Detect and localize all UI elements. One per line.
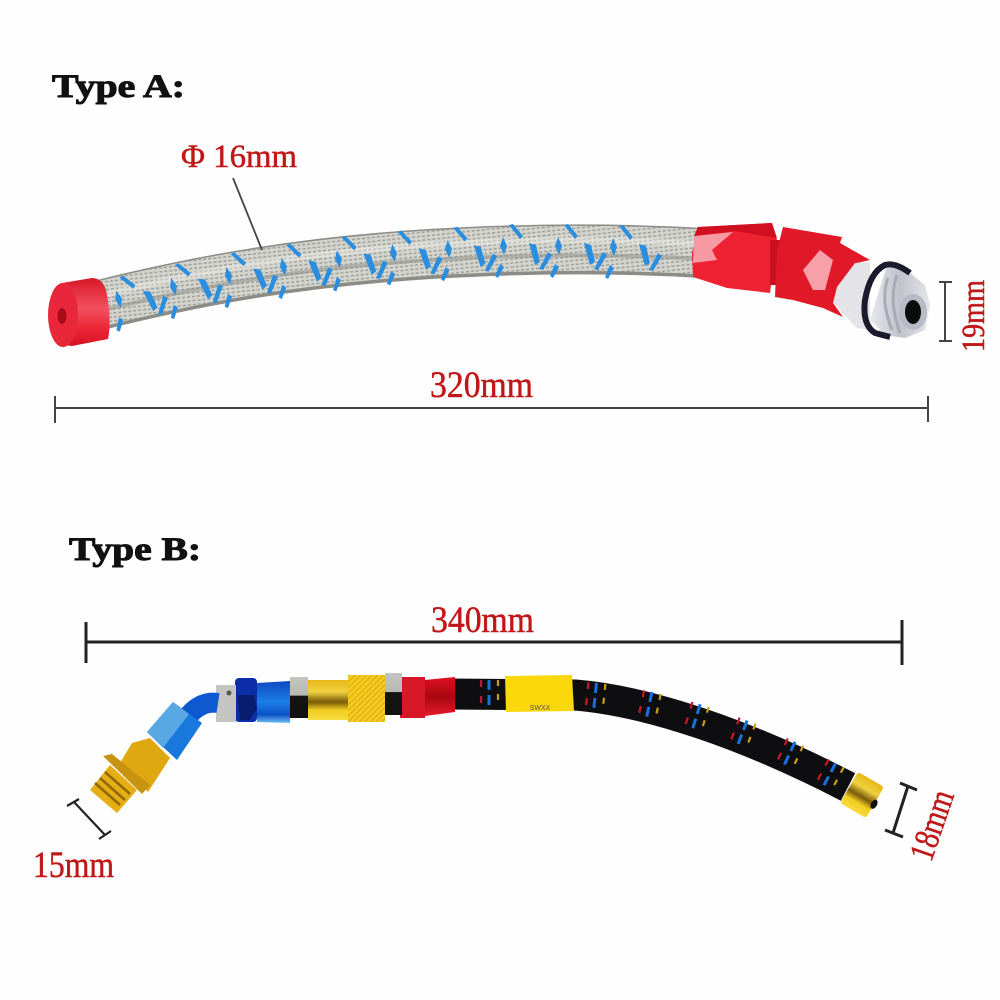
dimension: 19mm <box>939 280 992 352</box>
19mm label: 19mm <box>956 280 992 352</box>
silver threaded end <box>833 262 930 338</box>
gold threaded fitting <box>90 738 170 813</box>
hex nut <box>290 677 308 718</box>
braided silver hose <box>100 240 702 311</box>
heading: Type A: Type A: <box>52 69 185 105</box>
red elbow fitting <box>692 223 870 317</box>
15mm label: 15mm <box>33 845 114 886</box>
blue braid marks <box>106 224 662 332</box>
grey hex nut <box>216 685 236 722</box>
gold coupling <box>308 675 385 722</box>
18mm label: 18mm <box>902 785 962 866</box>
15mm bracket <box>67 799 111 839</box>
gold end tip <box>840 772 887 820</box>
blue elbow <box>184 703 218 722</box>
dimension: 18mm <box>885 783 962 866</box>
hose B diagram <box>90 673 887 820</box>
yellow label band <box>505 675 574 712</box>
black braided hose <box>450 694 848 787</box>
dimension: 15mm <box>33 799 114 886</box>
blue angled nut <box>147 702 202 760</box>
dimension: 340mm <box>86 600 902 665</box>
340mm line <box>86 620 902 665</box>
blue fitting <box>235 678 290 723</box>
diameter leader line <box>233 178 262 250</box>
red end cap <box>48 278 110 347</box>
yellow label band: SWXX <box>530 705 551 712</box>
320mm label: 320mm <box>430 365 533 406</box>
dimension: 320mm <box>55 365 928 423</box>
18mm bracket <box>885 783 917 837</box>
coloured braid marks <box>481 680 844 792</box>
19mm bracket <box>939 282 952 341</box>
hex nut <box>385 673 402 715</box>
red fitting <box>400 677 455 718</box>
dimension: hose diameter <box>181 139 297 250</box>
340mm label: 340mm <box>431 600 534 641</box>
diameter label: Φ 16mm <box>181 139 297 175</box>
heading: Type B: Type B: <box>69 532 201 568</box>
hose A diagram <box>48 223 930 347</box>
320mm line <box>55 396 928 423</box>
